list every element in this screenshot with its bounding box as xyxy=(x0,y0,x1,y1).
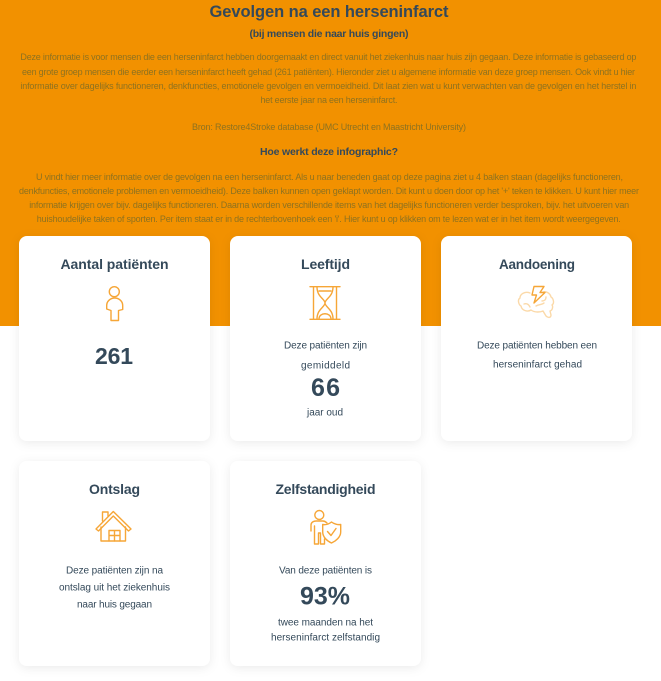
heading: Aantal patiënten: Aantal patiënten xyxy=(60,256,168,272)
text: Deze patiënten hebben een herseninfarct gehad xyxy=(477,340,597,370)
heading: Ontslag: Ontslag xyxy=(89,481,140,497)
text: twee maanden na het herseninfarct zelfstandig: twee maanden na het xyxy=(278,618,373,628)
icon: hourglass xyxy=(310,287,340,319)
intro paragraph xyxy=(20,52,636,105)
instructions paragraph xyxy=(19,172,639,224)
icon: person with shield xyxy=(311,510,341,544)
number: 66: 66 xyxy=(311,374,340,402)
card: Leeftijd xyxy=(230,236,421,441)
subheading: how it works: Hoe werkt deze infographic? xyxy=(260,146,398,158)
heading: Aandoening: Aandoening xyxy=(499,257,575,272)
text: jaar oud: jaar oud xyxy=(306,408,343,418)
icon: person xyxy=(107,287,123,320)
source line: Bron: Restore4Stroke database (UMC Utrecht en Maastricht University) xyxy=(192,122,466,132)
icon: brain with lightning bolt xyxy=(518,286,554,317)
intro paragraph: informatie over dagelijks functioneren, denkfuncties, emotionele gevolgen en vermoeidheid. Dit laat zien wat u kunt verwachten van de gevolgen en het herstel in xyxy=(20,81,636,91)
card: Ontslag xyxy=(19,461,210,666)
text: Deze patiënten hebben een herseninfarct gehad: herseninfarct gehad xyxy=(493,360,582,370)
number: 261: 261 xyxy=(95,343,133,369)
instructions paragraph: informatie krijgen over bijv. dagelijks functioneren. Daarna worden verschillende items van het dagelijks functioneren verder besproken, bijv. het uitvoeren van xyxy=(29,200,629,210)
icon: house xyxy=(96,512,131,541)
intro paragraph: een grote groep mensen die eerder een herseninfarct heeft gehad (261 patiënten). Hieronder ziet u algemene informatie van deze groep mensen. Ook vindt u hier xyxy=(22,67,635,77)
text: Deze patiënten zijn gemiddeld: gemiddeld xyxy=(301,360,350,372)
instructions paragraph: denkfuncties, emotionele problemen en vermoeidheid). Deze balken kunnen open geklapt worden. Dit kunt u doen door op het '+' teken te klikken. U kunt hier meer xyxy=(19,186,639,196)
text: twee maanden na het herseninfarct zelfstandig: herseninfarct zelfstandig xyxy=(271,632,380,644)
text: Deze patiënten zijn na ontslag uit het ziekenhuis naar huis gegaan xyxy=(59,566,170,610)
text: twee maanden na het herseninfarct zelfstandig xyxy=(271,618,380,644)
text: Deze patiënten hebben een herseninfarct gehad: Deze patiënten hebben een xyxy=(477,340,597,352)
instructions paragraph: U vindt hier meer informatie over de gevolgen na een herseninfarct. Als u naar beneden gaat op deze pagina ziet u 4 balken staan (dagelijks functioneren, xyxy=(36,172,623,182)
text: Deze patiënten zijn gemiddeld: Deze patiënten zijn xyxy=(284,340,367,352)
title: Gevolgen na een herseninfarct xyxy=(210,3,449,21)
heading: Leeftijd: Leeftijd xyxy=(301,256,350,272)
intro paragraph: Deze informatie is voor mensen die een herseninfarct hebben doorgemaakt en direct vanuit het ziekenhuis naar huis zijn gegaan. Deze informatie is gebaseerd op xyxy=(20,52,636,62)
text: Deze patiënten zijn na ontslag uit het ziekenhuis naar huis gegaan: ontslag uit het ziekenhuis xyxy=(59,582,170,594)
orange header background xyxy=(0,0,661,326)
subtitle: (bij mensen die naar huis gingen) xyxy=(250,28,408,40)
text: Deze patiënten zijn gemiddeld xyxy=(284,340,367,372)
heading: Zelfstandigheid: Zelfstandigheid xyxy=(276,481,376,497)
number: 93%: 93% xyxy=(300,582,350,610)
text: Deze patiënten zijn na ontslag uit het ziekenhuis naar huis gegaan: naar huis gegaan xyxy=(77,600,152,610)
intro paragraph: het eerste jaar na een herseninfarct. xyxy=(260,95,398,105)
text: Van deze patiënten is: Van deze patiënten is xyxy=(279,566,372,576)
card: Aantal patiënten xyxy=(19,236,210,441)
instructions paragraph: huishoudelijke taken of sporten. Per item staat er in de rechterbovenhoek een 'i'. Hier kunt u op klikken om te lezen wat er in het item wordt weergegeven. xyxy=(37,214,621,224)
text: Deze patiënten zijn na ontslag uit het ziekenhuis naar huis gegaan: Deze patiënten zijn na xyxy=(66,566,163,576)
card: Zelfstandigheid xyxy=(230,461,421,666)
card: Aandoening xyxy=(441,236,632,441)
